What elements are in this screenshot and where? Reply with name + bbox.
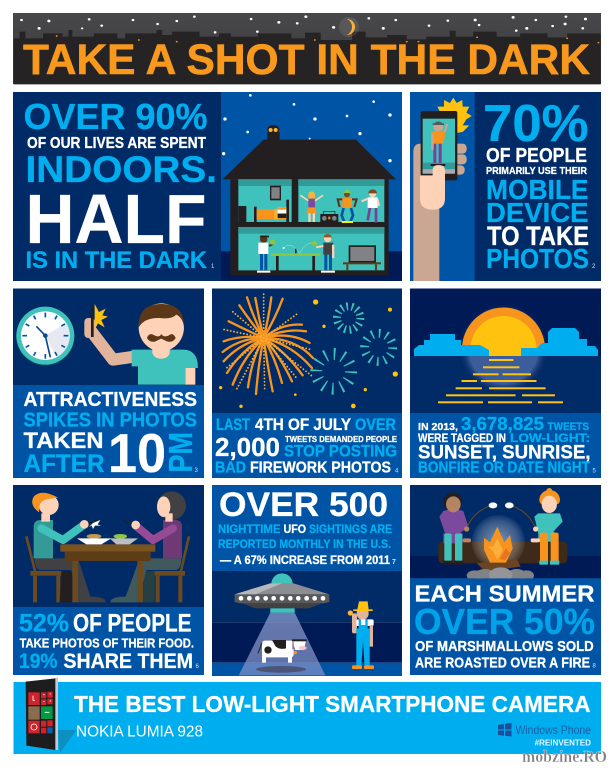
text: over 90 percent indoors: 1 bbox=[211, 264, 215, 270]
night city skyline with stars and moon bbox=[14, 15, 601, 84]
panel: fireworks bbox=[212, 288, 402, 478]
television on stand bbox=[343, 245, 381, 270]
selfie illustration bbox=[16, 303, 198, 385]
house structure bbox=[223, 140, 396, 275]
text: fourth of july tweets: OVER bbox=[355, 415, 396, 434]
text: low-light tweets bbox=[418, 414, 596, 477]
sparks bbox=[219, 299, 398, 408]
icon: crescent moon bbox=[339, 17, 359, 37]
text: low-light tweets: 3,678,825 bbox=[461, 414, 544, 434]
title: TAKE A SHOT IN THE DARK bbox=[23, 36, 590, 84]
text: marshmallows: EACH SUMMER bbox=[414, 581, 595, 607]
right person roasting bbox=[512, 488, 563, 565]
panel: house illustration bbox=[221, 92, 402, 281]
text: fourth of july tweets: LAST bbox=[216, 415, 250, 434]
text: 70 percent of people: DEVICE bbox=[486, 197, 588, 228]
text: fourth of july tweets: FIREWORK PHOTOS bbox=[250, 460, 391, 477]
orange firework burst bbox=[221, 294, 314, 394]
text: over 500 UFO sightings bbox=[218, 486, 396, 567]
farmer bbox=[348, 601, 374, 669]
table with plates bbox=[60, 534, 155, 602]
clouds bbox=[414, 334, 489, 356]
text: 52 percent food photos: OF PEOPLE bbox=[73, 610, 192, 638]
text: attractiveness spikes: TAKEN bbox=[24, 428, 104, 453]
product name: NOKIA LUMIA 928 bbox=[76, 724, 203, 741]
text: low-light tweets: WERE TAGGED IN bbox=[418, 433, 506, 445]
man with moustache taking selfie bbox=[84, 303, 198, 385]
stars bbox=[222, 94, 392, 162]
sun reflection bbox=[438, 359, 563, 403]
text: 52 percent food photos: SHARE THEM bbox=[63, 650, 193, 673]
icon: clock bbox=[16, 307, 75, 366]
panel: campfire marshmallows bbox=[410, 485, 601, 675]
text: marshmallows bbox=[414, 581, 596, 672]
text: 52 percent food photos bbox=[19, 610, 200, 673]
text: over 500 UFO sightings: 7 bbox=[392, 559, 396, 566]
footer headline: THE BEST LOW-LIGHT SMARTPHONE CAMERA bbox=[74, 691, 590, 717]
icon: smartphone with selfie bbox=[421, 111, 457, 180]
icon: camera flash bbox=[435, 98, 472, 135]
text: attractiveness spikes: AFTER bbox=[24, 450, 104, 478]
tractor beam bbox=[239, 613, 325, 675]
UFO illustration bbox=[212, 571, 402, 676]
panel: food photos bbox=[13, 485, 204, 675]
panel: sunset bbox=[410, 288, 601, 478]
text: fourth of july tweets: 4 bbox=[395, 469, 399, 475]
marshmallows bbox=[489, 502, 497, 508]
text: over 500 UFO sightings: — A 67% INCREASE FROM 2011 bbox=[220, 553, 390, 567]
text: marshmallows: OVER 50% bbox=[414, 601, 595, 642]
text: over 500 UFO sightings: NIGHTTIME bbox=[218, 522, 280, 536]
text: over 500 UFO sightings: REPORTED MONTHLY IN THE U.S. bbox=[218, 537, 391, 551]
text: attractiveness spikes bbox=[24, 389, 199, 484]
panel: attractiveness bbox=[13, 288, 204, 484]
text: 70 percent of people: 2 bbox=[592, 264, 596, 270]
bedroom bbox=[238, 186, 289, 222]
text: over 90 percent indoors bbox=[24, 96, 217, 274]
text: attractiveness spikes: PM bbox=[162, 432, 199, 472]
text: over 90 percent indoors: OVER 90% bbox=[24, 96, 208, 137]
panel: header banner bbox=[13, 13, 601, 84]
fireworks illustration bbox=[219, 294, 398, 408]
text: over 90 percent indoors: IS IN THE DARK bbox=[26, 247, 208, 274]
text: 70 percent of people: 70% bbox=[483, 95, 588, 153]
rocks bbox=[466, 569, 534, 578]
panel: indoors statistic bbox=[13, 92, 221, 281]
text: fourth of july tweets bbox=[215, 415, 399, 477]
text: 70 percent of people: MOBILE bbox=[486, 174, 588, 205]
text: over 500 UFO sightings: SIGHTINGS ARE bbox=[309, 522, 392, 536]
text: fourth of july tweets: STOP POSTING bbox=[284, 442, 397, 460]
text: over 90 percent indoors: OF OUR LIVES ARE SPENT bbox=[27, 135, 206, 152]
text: 52 percent food photos: TAKE PHOTOS OF THEIR FOOD. bbox=[20, 636, 194, 651]
text: 52 percent food photos: 52% bbox=[19, 610, 69, 638]
text: fourth of july tweets: BAD bbox=[215, 460, 246, 477]
text: over 500 UFO sightings: OVER 500 bbox=[219, 486, 388, 524]
Windows Phone logo bbox=[498, 723, 591, 748]
arm and fingers bbox=[413, 144, 467, 281]
right diner bbox=[110, 491, 186, 602]
text: 52 percent food photos: 19% bbox=[19, 650, 58, 673]
right chair bbox=[153, 536, 190, 602]
text: low-light tweets: SUNSET, SUNRISE, bbox=[418, 442, 590, 464]
panel: footer bbox=[14, 678, 601, 754]
text: attractiveness spikes: ATTRACTIVENESS bbox=[24, 389, 197, 411]
text: 70 percent of people: PHOTOS bbox=[486, 243, 589, 274]
panel: UFO sightings bbox=[212, 485, 402, 676]
text: low-light tweets: TWEETS bbox=[548, 421, 589, 433]
icon: Lumia phone bbox=[26, 678, 76, 753]
text: attractiveness spikes: SPIKES IN PHOTOS bbox=[24, 410, 197, 432]
sunset illustration bbox=[414, 303, 598, 403]
Windows Phone logo: #REINVENTED bbox=[535, 739, 591, 748]
campfire illustration bbox=[410, 485, 601, 583]
text: 52 percent food photos: 6 bbox=[196, 664, 200, 670]
cow bbox=[258, 639, 307, 663]
glow bbox=[472, 515, 525, 562]
dancing people and boombox bbox=[300, 189, 379, 223]
text: fourth of july tweets: TWEETS DEMANDED PEOPLE bbox=[285, 434, 397, 444]
text: attractiveness spikes: 3 bbox=[194, 468, 198, 474]
left person roasting bbox=[439, 492, 492, 565]
text: fourth of july tweets: 4TH OF JULY bbox=[255, 415, 352, 434]
flying saucer bbox=[235, 573, 329, 613]
panel: 70 percent mobile statistic bbox=[410, 92, 601, 281]
Windows Phone logo: Windows Phone bbox=[516, 723, 591, 737]
text: 70 percent of people: PRIMARILY USE THEIR bbox=[486, 165, 587, 177]
hand holding phone illustration bbox=[410, 92, 475, 281]
text: fourth of july tweets: 2,000 bbox=[215, 432, 280, 462]
text: over 90 percent indoors: INDOORS. bbox=[26, 149, 217, 190]
log bbox=[438, 542, 567, 563]
flames bbox=[484, 527, 513, 563]
ping pong table and players bbox=[257, 234, 335, 273]
text: 70 percent of people bbox=[483, 95, 596, 274]
text: over 90 percent indoors: HALF bbox=[26, 180, 206, 258]
text: attractiveness spikes: 10 bbox=[108, 422, 166, 484]
teal firework bursts bbox=[316, 306, 393, 389]
text: 70 percent of people: OF PEOPLE bbox=[486, 145, 587, 167]
left diner bbox=[32, 493, 106, 602]
icon: owl on chimney bbox=[267, 125, 280, 142]
text: low-light tweets: LOW-LIGHT: bbox=[510, 433, 590, 445]
text: low-light tweets: IN 2013, bbox=[418, 421, 458, 433]
left chair bbox=[25, 536, 62, 602]
text: marshmallows: 8 bbox=[592, 664, 596, 670]
text: low-light tweets: 5 bbox=[592, 469, 596, 475]
text: over 500 UFO sightings: UFO bbox=[284, 522, 306, 536]
thumb bbox=[420, 165, 445, 210]
text: 70 percent of people: TO TAKE bbox=[487, 221, 589, 251]
fire logs bbox=[477, 559, 521, 571]
dinner illustration bbox=[25, 491, 190, 602]
